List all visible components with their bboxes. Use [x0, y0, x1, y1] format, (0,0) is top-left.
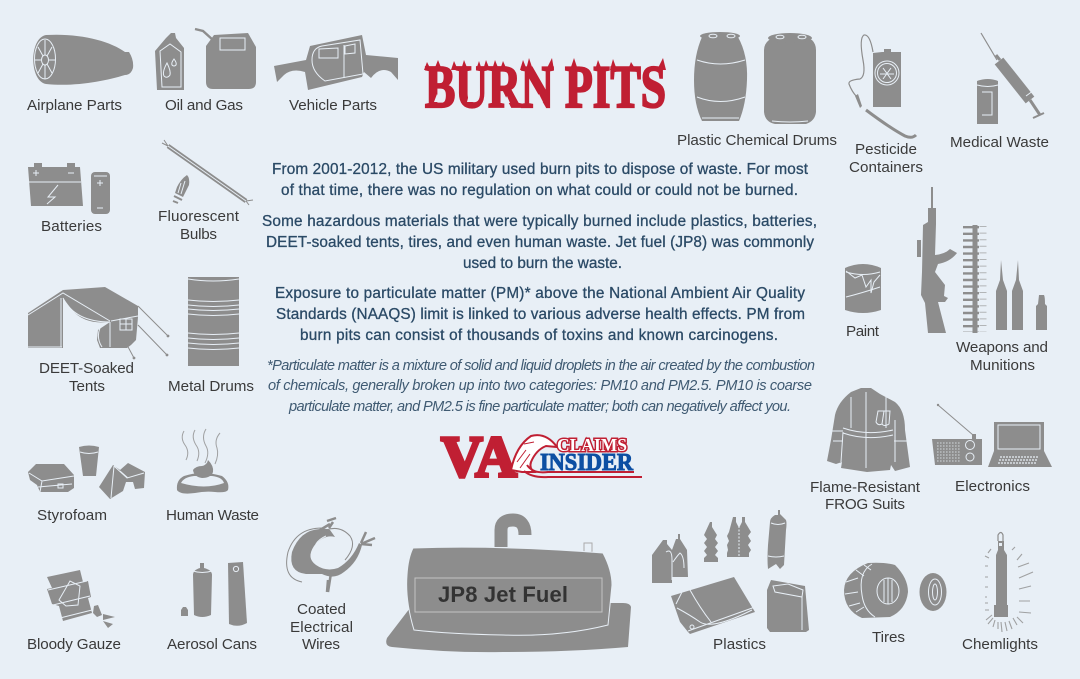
text block: hazardous materials paragraph: DEET-soaked tents, tires, and even human waste. Jet fuel (JP8) was commonly [266, 234, 814, 251]
label: Tires [872, 629, 905, 646]
text block: particulate matter paragraph: Exposure to particulate matter (PM)* above the National Ambient Air Quality [275, 285, 805, 302]
icon: oil bottle and jerry can [155, 29, 256, 90]
item: paint [845, 264, 881, 340]
item: vehicle parts [274, 35, 398, 114]
label: Containers [849, 159, 923, 176]
label: Tents [69, 378, 105, 395]
icon: tires [844, 563, 946, 618]
label: Electrical [290, 619, 353, 636]
label: Plastics [713, 636, 766, 653]
text block: intro paragraph: of that time, there was no regulation on what could or could not be burned. [281, 182, 798, 199]
icon: car battery and cell [28, 163, 110, 214]
label: Airplane Parts [27, 97, 122, 114]
item: chemlights [962, 532, 1038, 653]
label: Human Waste [166, 507, 259, 524]
label: Flame-Resistant [810, 479, 921, 496]
icon: metal drum [188, 277, 239, 366]
tank label plate [415, 578, 602, 612]
label: Metal Drums [168, 378, 254, 395]
label: Plastic Chemical Drums [677, 132, 837, 149]
icon: radio [932, 404, 982, 465]
label: Chemlights [962, 636, 1038, 653]
label [849, 141, 923, 176]
text block: footnote: *Particulate matter is a mixture of solid and liquid droplets in the air created by the combustion [267, 358, 815, 374]
item: aerosol cans [167, 562, 257, 653]
icon: spray cans [181, 562, 247, 626]
icon: laptop [988, 422, 1052, 467]
item: human waste [166, 429, 259, 524]
text block: intro paragraph: From 2001-2012, the US military used burn pits to dispose of waste. For most [272, 161, 809, 178]
label: Fluorescent [158, 208, 240, 225]
tank body [407, 547, 612, 635]
text block: particulate matter paragraph: Standards (NAAQS) limit is linked to various adverse health effects. PM from [276, 306, 805, 323]
item: JP8 jet fuel tank [386, 520, 631, 652]
label: Batteries [41, 218, 102, 235]
icon: jugs [652, 534, 688, 583]
text block: particulate matter paragraph [275, 285, 805, 344]
label: Vehicle Parts [289, 97, 377, 114]
icon: bullets [996, 260, 1047, 330]
item: batteries [28, 163, 110, 235]
item: electronics [932, 404, 1052, 495]
label: Wires [302, 636, 340, 653]
tank base [386, 603, 631, 652]
icon: tent [28, 287, 169, 359]
icon: ammunition belt [971, 225, 983, 333]
item: pesticide containers [849, 35, 923, 176]
text block: hazardous materials paragraph [262, 213, 817, 272]
text block: hazardous materials paragraph: Some hazardous materials that were typically burned include plastics, batteries, [262, 213, 817, 230]
label: Bloody Gauze [27, 636, 121, 653]
text block: intro paragraph [272, 161, 809, 199]
item: plastic chemical drums [677, 32, 837, 149]
label [956, 339, 1048, 374]
item: medical waste [950, 33, 1049, 151]
icon: vehicle shell [274, 35, 398, 90]
label: Aerosol Cans [167, 636, 257, 653]
item: weapons and munitions [917, 187, 1048, 374]
item: DEET-soaked tents [28, 287, 169, 395]
item: styrofoam [28, 446, 145, 524]
label [158, 208, 240, 243]
title: BURN PITS [425, 54, 666, 120]
icon: gauze and bandages [47, 570, 115, 628]
label: DEET-Soaked [39, 360, 134, 377]
label: Munitions [970, 357, 1035, 374]
icon: syringe and vial [977, 33, 1044, 124]
item: plastics [652, 510, 809, 653]
label: Paint [846, 323, 880, 340]
label: Bulbs [180, 226, 217, 243]
label: FROG Suits [825, 496, 905, 513]
label: Styrofoam [37, 507, 107, 524]
item: oil and gas [155, 29, 256, 114]
icon: paint can [845, 264, 881, 313]
logo: VA Claims Insider: CLAIMS [557, 435, 627, 455]
text block: footnote: particulate matter, and PM2.5 is fine particulate matter; both can negatively affect you. [288, 399, 791, 415]
item: airplane parts [27, 35, 133, 114]
label: Coated [297, 601, 346, 618]
label: Weapons and [956, 339, 1048, 356]
icon: foam containers and cup [28, 446, 145, 499]
icon: pipe [501, 520, 525, 547]
icon: jacket [827, 388, 910, 472]
label: Pesticide [855, 141, 917, 158]
icon: tube and bulb [162, 140, 253, 205]
logo: VA Claims Insider: INSIDER [540, 450, 634, 476]
icon: glow stick [985, 532, 1033, 632]
item: bloody gauze [27, 570, 121, 653]
label: Medical Waste [950, 134, 1049, 151]
item: fluorescent bulbs [158, 140, 253, 243]
item: coated electrical wires [287, 518, 375, 653]
icon: plastic canister [767, 580, 809, 632]
item: tires [844, 563, 946, 646]
label: Oil and Gas [165, 97, 243, 114]
icon: barrels [694, 32, 816, 124]
text block: particulate matter paragraph: burn pits can consist of thousands of toxins and known carcinogens. [300, 327, 778, 344]
icon: rifle [917, 187, 957, 333]
tank label: JP8 Jet Fuel [438, 582, 568, 607]
label [290, 601, 353, 653]
label [810, 479, 921, 513]
text block: hazardous materials paragraph: used to burn the waste. [463, 255, 622, 272]
icon: sprayer [849, 35, 916, 137]
text block: footnote: of chemicals, generally broken up into two categories: PM10 and PM2.5. PM10 is coarse [268, 378, 812, 394]
icon: tarp [671, 577, 755, 634]
icon: waste pile and steam [177, 429, 228, 494]
label: Electronics [955, 478, 1030, 495]
icon: wire coil [287, 518, 375, 592]
icon: ribbed bottles [704, 510, 786, 569]
text block: footnote [267, 358, 815, 415]
icon: jet engine [33, 35, 133, 85]
item: flame-resistant FROG suits [810, 388, 921, 513]
logo: VA Claims Insider [441, 424, 642, 489]
label [39, 360, 134, 395]
icon: vent box [584, 543, 592, 552]
item: metal drums [168, 277, 254, 395]
logo: VA Claims Insider: VA [441, 424, 517, 489]
